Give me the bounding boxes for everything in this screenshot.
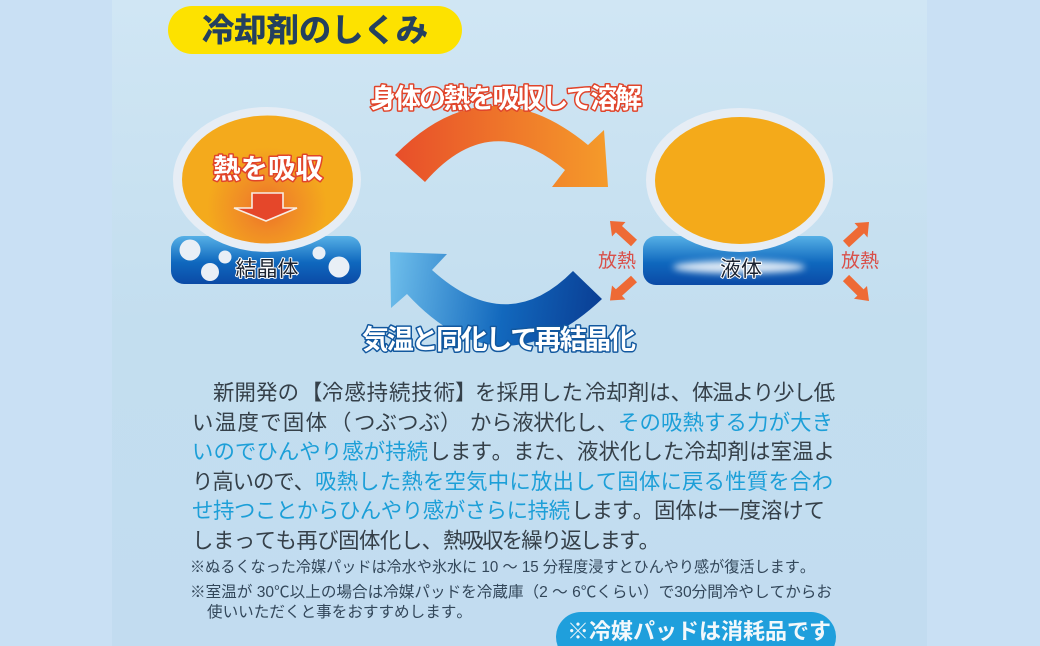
body paragraph: 冷感持続技術 (322, 381, 455, 405)
body paragraph: から液状化し、 (470, 411, 618, 435)
footnotes: 使いいただくと事をおすすめします。 (207, 603, 472, 621)
label: crystal: 結晶体 (236, 258, 298, 281)
liquid glow (673, 260, 805, 274)
body paragraph: （ (330, 411, 351, 435)
notice text: ※冷媒パッドは消耗品です (567, 619, 831, 644)
heat release right (841, 222, 879, 301)
footnotes: ※室温が 30℃以上の場合は冷媒パッドを冷蔵庫（2 ～ 6℃くらい）で30分間冷やしてからお (190, 583, 832, 601)
footnotes (190, 558, 832, 621)
label: heat release: 放熱 (598, 250, 636, 272)
body paragraph: い温度で固体 (192, 411, 327, 435)
label: heat absorption: 熱を吸収 (213, 153, 323, 184)
icon: arrow down-right (843, 275, 869, 301)
title pill (168, 6, 462, 54)
heading: melting: 身体の熱を吸収して溶解 (370, 84, 642, 114)
body paragraph: いのでひんやり感が持続 (192, 440, 428, 464)
body paragraph: つぶつぶ (354, 411, 440, 435)
body paragraph: 吸熱した熱を空気中に放出して固体に戻る性質を合わ (315, 470, 833, 494)
body paragraph: 液状化した冷却剤は室温よ (577, 440, 835, 464)
label: heat release: 放熱 (841, 250, 879, 272)
body paragraph: 【 (301, 381, 322, 405)
footnotes: ※ぬるくなった冷媒パッドは冷水や氷水に 10 ～ 15 分程度浸すとひんやり感が復活します。 (190, 558, 815, 576)
body paragraph: を採用した (475, 381, 583, 405)
crystal pad (171, 236, 361, 284)
right white ring (646, 108, 833, 252)
body paragraph: 熱吸収を繰り返します。 (443, 529, 660, 553)
left diagram: crystal absorbing heat (171, 107, 361, 284)
bottom arrow: recrystallising (390, 252, 602, 346)
heading: recrystallising: 気温と同化して再結晶化 (362, 325, 636, 355)
icon: arrow up-right (843, 222, 869, 247)
icon: down arrow (234, 193, 297, 221)
title text: 冷却剤のしくみ (202, 12, 428, 48)
body paragraph: 】 (455, 381, 476, 405)
body paragraph: せ持つことからひんやり感がさらに持続 (192, 499, 570, 523)
body paragraph: り高いので、 (192, 470, 315, 494)
liquid pad (643, 236, 833, 285)
body paragraph: しまっても再び固体化し、 (192, 529, 443, 553)
left white ring (173, 107, 361, 252)
icon: arrow up-left (610, 221, 637, 246)
body paragraph: 新開発の (213, 381, 299, 405)
top arrow: melting (395, 106, 608, 187)
crystal bubbles (180, 240, 350, 281)
body paragraph: 固体は一度溶けて (654, 499, 825, 523)
label: liquid: 液体 (720, 258, 762, 281)
body paragraph: します。 (429, 440, 513, 464)
heat release left (598, 221, 637, 300)
body paragraph: 冷却剤は、 (585, 381, 692, 405)
body paragraph (192, 381, 835, 553)
body paragraph: その吸熱する力が大き (618, 411, 833, 435)
body paragraph: また、 (513, 440, 577, 464)
left orange disc (182, 116, 353, 244)
right orange disc (655, 117, 825, 244)
right diagram: liquid releasing heat (643, 108, 833, 285)
consumable notice pill (556, 612, 836, 646)
body paragraph: 体温より少し低 (692, 381, 835, 405)
body paragraph: します。 (571, 499, 654, 523)
body paragraph: ） (440, 411, 461, 435)
icon: arrow down-left (610, 276, 637, 300)
